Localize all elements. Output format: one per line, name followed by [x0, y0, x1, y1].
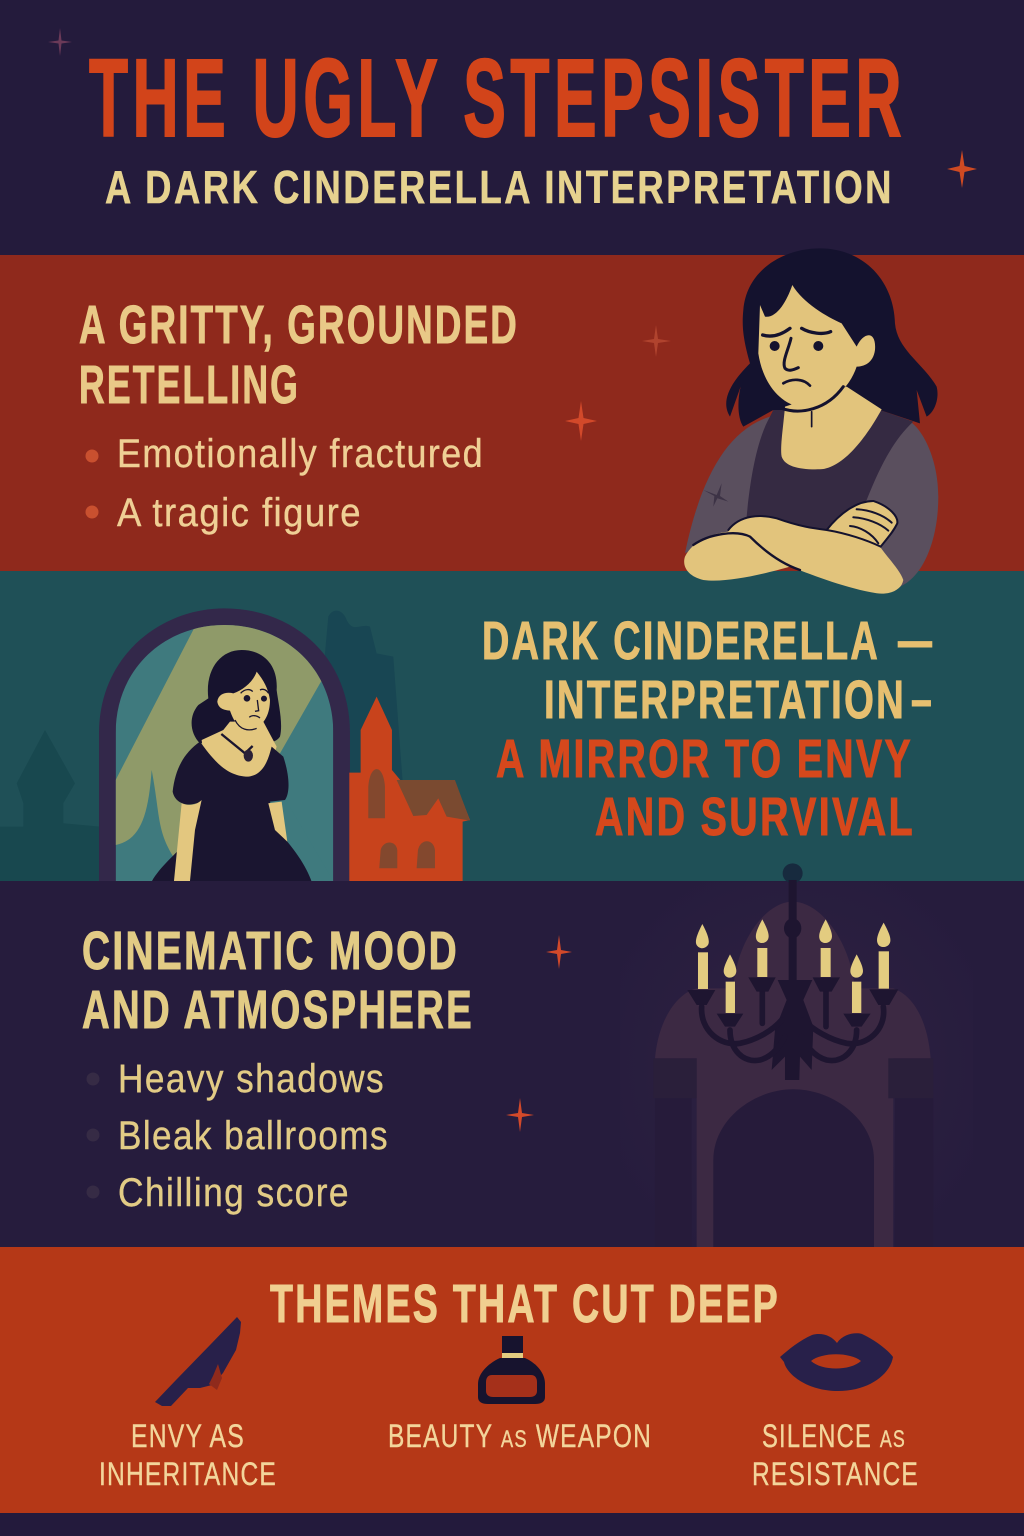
label: BEAUTY AS WEAPON: [388, 1418, 652, 1454]
bullet list: A tragic figure: [117, 491, 362, 535]
theme: beauty: [388, 1336, 652, 1454]
bottom strip: [0, 1513, 1024, 1536]
crossed arms: [684, 502, 903, 594]
sparkle: [565, 401, 597, 441]
bullet list: [86, 1057, 389, 1215]
heading: dark cinderella: [482, 611, 934, 730]
panel: cinematic mood: [0, 863, 1024, 1247]
heading: dark cinderella: —: [898, 611, 934, 671]
bodice: [747, 410, 913, 533]
heading line two: RETELLING: [79, 355, 300, 415]
heading: A GRITTY, GROUNDED: [79, 295, 519, 355]
icon: perfume bottle: [478, 1336, 545, 1404]
label: SILENCE AS: [762, 1418, 906, 1454]
label line two: RESISTANCE: [752, 1456, 919, 1492]
silhouette: right tower: [325, 611, 403, 790]
sleeves: [685, 417, 938, 587]
icon: knife: [155, 1317, 241, 1406]
panel: mirror: [0, 571, 1024, 882]
theme: envy: [99, 1317, 277, 1492]
bullet list: Chilling score: [118, 1171, 350, 1215]
silhouette: left tower: [0, 730, 100, 881]
patch mark: [703, 483, 728, 507]
icon: lips: [780, 1333, 893, 1391]
illustration: sad stepsister with crossed arms: [684, 248, 938, 594]
sparkle top left: [48, 28, 72, 56]
sparkle: [642, 325, 671, 357]
sparkle top right: [947, 150, 977, 188]
heading: dark cinderella: –: [911, 670, 934, 730]
label: ENVY AS: [131, 1418, 245, 1454]
illustration: girl in arch and castle: [72, 608, 470, 881]
heading: mirror to envy: [496, 729, 915, 847]
arm lines: [693, 501, 897, 570]
heading line two: AND ATMOSPHERE: [82, 980, 474, 1040]
illustration: ballroom arch: [620, 863, 973, 1247]
facial features: [763, 328, 843, 427]
heading: THEMES THAT CUT DEEP: [270, 1274, 780, 1334]
bullet list: [86, 432, 484, 535]
bullet list: Heavy shadows: [118, 1057, 385, 1101]
face: [758, 285, 875, 408]
panel: themes: [0, 1247, 1024, 1513]
theme: silence: [752, 1333, 919, 1492]
heading: CINEMATIC MOOD: [82, 921, 459, 981]
heading: mirror to envy: AND SURVIVAL: [595, 787, 915, 847]
sparkle: [506, 1098, 534, 1132]
label line two: INHERITANCE: [99, 1456, 277, 1492]
girl in black dress: [152, 650, 312, 882]
hair: [726, 248, 938, 427]
sparkle: [546, 935, 572, 969]
neck and chest: [781, 387, 882, 469]
chandelier: [687, 863, 898, 1080]
bullet list: Bleak ballrooms: [118, 1114, 389, 1158]
red church: [349, 697, 470, 881]
panel: gritty retelling: [0, 255, 1024, 571]
arch frame: [99, 608, 350, 881]
bullet list: Emotionally fractured: [117, 432, 484, 476]
arch interior: [116, 623, 333, 882]
header panel: [0, 0, 1024, 255]
candles: [696, 919, 890, 1013]
